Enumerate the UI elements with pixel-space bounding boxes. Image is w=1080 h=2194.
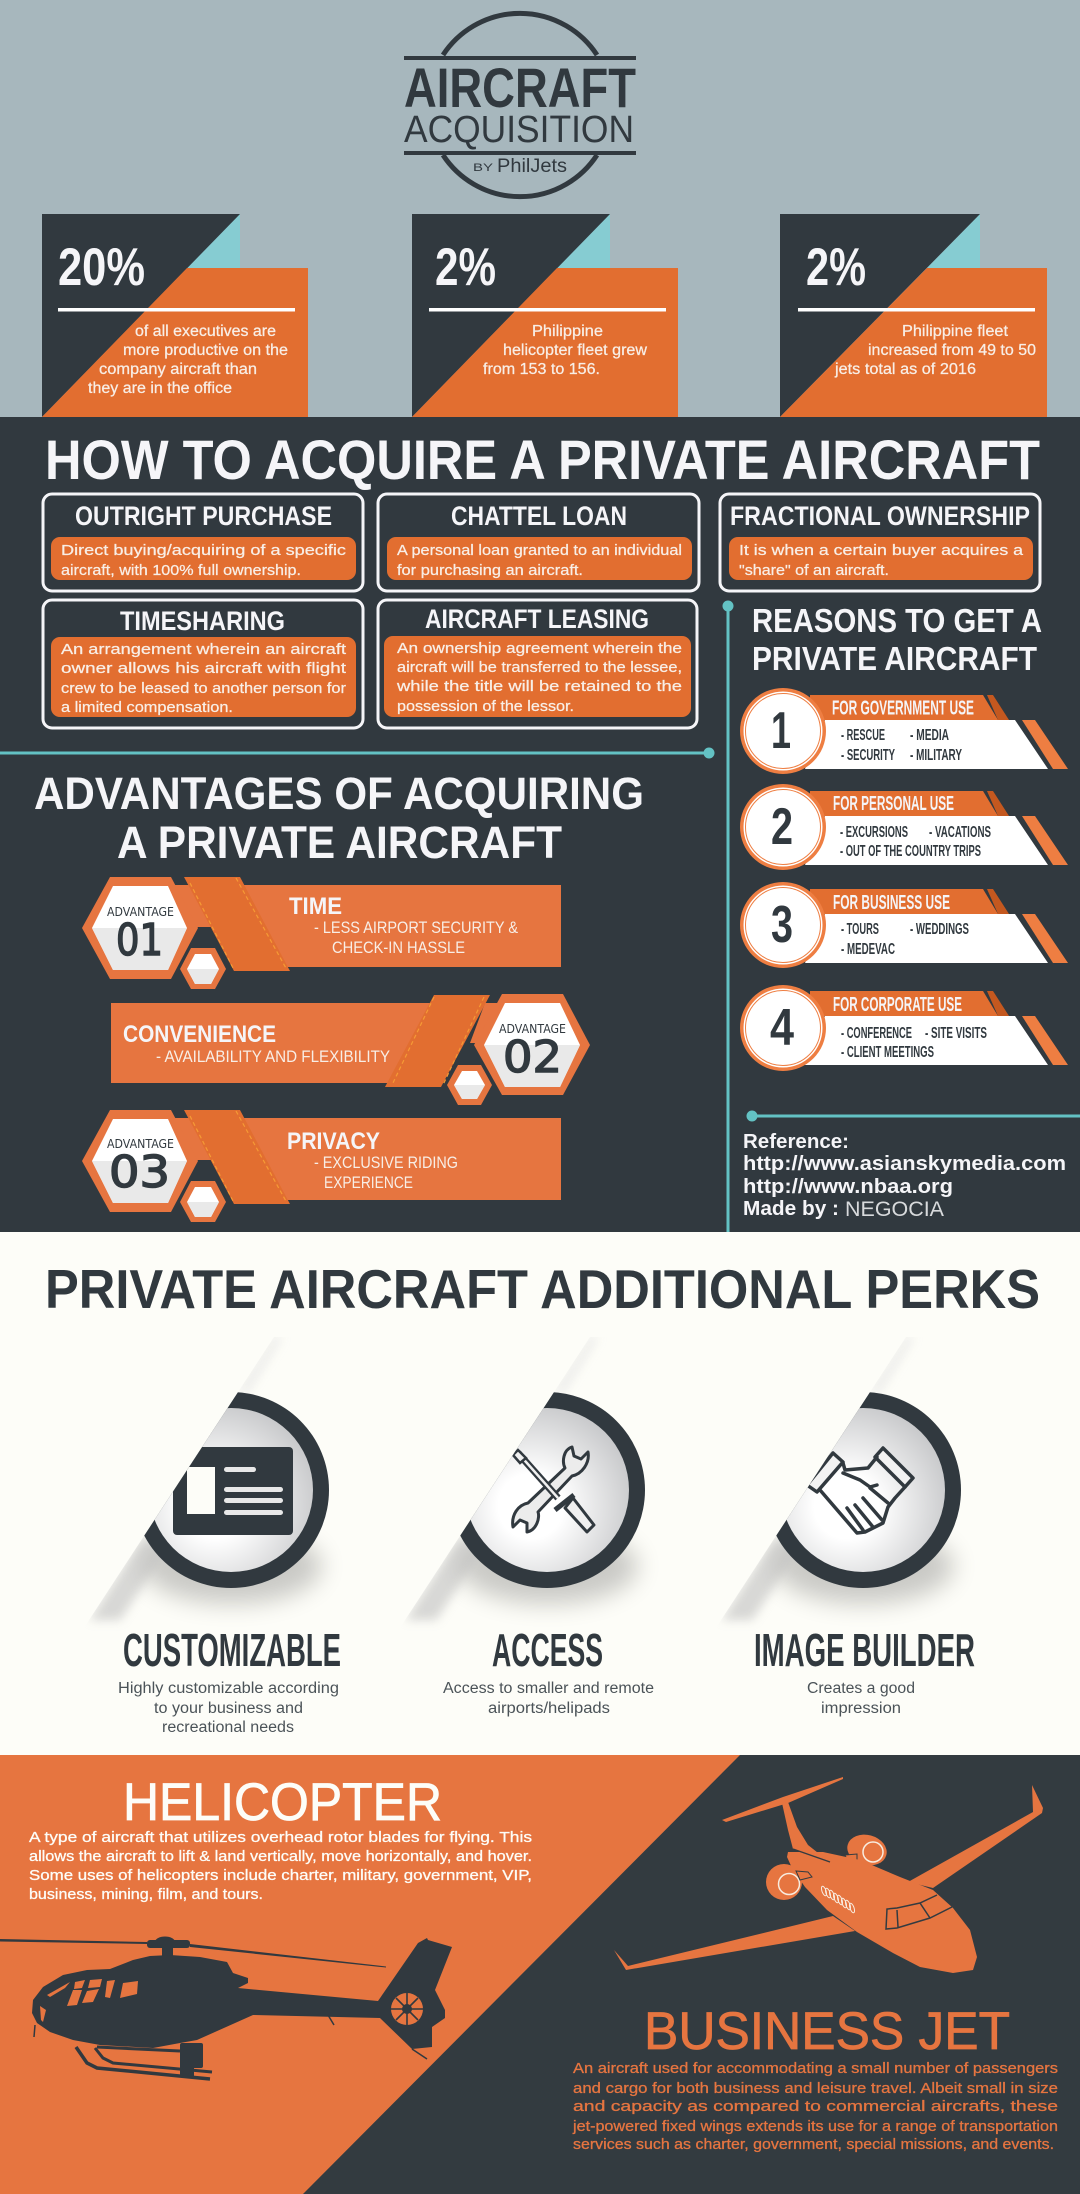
helicopter title and text: [29, 1773, 532, 1903]
panel: aircraft leasing: while the title will be retained to the: [396, 678, 682, 695]
stat card: 2% jet fleet: [780, 214, 1047, 417]
panel: aircraft leasing: An ownership agreement wherein the: [397, 640, 682, 657]
panel: outright purchase: [43, 494, 363, 591]
stat card: 2% helicopter fleet: [412, 214, 678, 417]
reason 2: personal use: - EXCURSIONS: [840, 824, 908, 841]
panel: fractional ownership: "share" of an aircraft.: [739, 562, 889, 579]
reason 3: business use: - TOURS: [841, 921, 879, 938]
advantage 03: privacy: - EXCLUSIVE RIDING: [314, 1153, 458, 1172]
reference credits: Reference:: [743, 1131, 849, 1153]
stat card: 20%: [42, 214, 308, 417]
panel: aircraft leasing: aircraft will be transferred to the lessee,: [397, 659, 682, 676]
stat card: 2% jet fleet: 2%: [806, 238, 866, 297]
business jet title and text: [572, 2002, 1058, 2153]
panel: timesharing: owner allows his aircraft with flight: [61, 660, 347, 677]
advantage 03: privacy: PRIVACY: [287, 1128, 380, 1155]
logo: Aircraft Acquisition by PhilJets: BY: [473, 162, 494, 174]
advantage 01: time: 01: [116, 915, 163, 966]
reference credits: [743, 1131, 1066, 1221]
heading: reasons: [752, 602, 1042, 677]
panel: business jet dark side: [303, 1755, 1080, 2194]
stat card: 20%: more productive on the: [123, 342, 288, 359]
reason 3: business use: [740, 882, 1068, 968]
logo: Aircraft Acquisition by PhilJets: [404, 13, 636, 197]
reason 1: government use: [740, 688, 1068, 774]
business jet title and text: and capacity as compared to commercial aircrafts, these: [573, 2098, 1058, 2115]
reason 4: corporate use: - CLIENT MEETINGS: [841, 1044, 934, 1061]
perk: image builder: impression: [821, 1700, 901, 1717]
business jet title and text: jet-powered fixed wings extends its use for a range of transportation: [572, 2118, 1058, 2135]
panel: timesharing: a limited compensation.: [61, 699, 233, 716]
panel: perks background: [0, 1232, 1080, 1756]
stat card: 2% jet fleet: Philippine fleet: [902, 323, 1009, 340]
reason 3: business use: - WEDDINGS: [910, 921, 969, 938]
panel: aircraft leasing: [378, 600, 697, 728]
reference credits: NEGOCIA: [845, 1198, 944, 1221]
panel: chattel loan: A personal loan granted to an individual: [397, 542, 682, 559]
perk: access: airports/helipads: [488, 1700, 610, 1717]
panel: fractional ownership: It is when a certain buyer acquires a: [739, 542, 1024, 559]
reason 3: business use: - MEDEVAC: [841, 941, 895, 958]
stat card: 2% helicopter fleet: 2%: [435, 238, 496, 297]
advantage 02: convenience: [111, 994, 590, 1105]
reason 4: corporate use: FOR CORPORATE USE: [833, 994, 962, 1016]
helicopter title and text: allows the aircraft to lift & land vertically, move horizontally, and hover.: [29, 1848, 532, 1865]
business jet title and text: An aircraft used for accommodating a small number of passengers: [573, 2060, 1058, 2077]
perk: customizable: [90, 1337, 341, 1736]
panel: dark how-to section background: [0, 417, 1080, 1232]
reason 4: corporate use: - SITE VISITS: [925, 1025, 987, 1042]
logo: Aircraft Acquisition by PhilJets: ACQUISITION: [404, 109, 634, 151]
business jet title and text: services such as charter, government, special missions, and events.: [573, 2136, 1054, 2153]
helicopter title and text: business, mining, film, and tours.: [29, 1886, 263, 1903]
reason 1: government use: - MEDIA: [910, 727, 949, 744]
advantage 02: convenience: 02: [503, 1032, 562, 1083]
reason 1: government use: - SECURITY: [841, 747, 895, 764]
panel: outright purchase: OUTRIGHT PURCHASE: [75, 501, 332, 531]
helicopter title and text: A type of aircraft that utilizes overhead rotor blades for flying. This: [29, 1829, 532, 1846]
panel: chattel loan: [378, 494, 699, 591]
panel: header background: [0, 0, 1080, 417]
panel: helicopter orange side: [0, 1755, 1080, 2194]
advantage 01: time: TIME: [289, 893, 342, 920]
advantage 03: privacy: [82, 1110, 561, 1222]
reason 3: business use: FOR BUSINESS USE: [833, 892, 950, 914]
stat card: 2% helicopter fleet: from 153 to 156.: [483, 361, 600, 378]
reason 1: government use: - MILITARY: [910, 747, 962, 764]
teal divider lines with dots: [0, 600, 1080, 1232]
reason 2: personal use: 2: [771, 798, 793, 856]
panel: aircraft leasing: possession of the lessor.: [397, 698, 574, 715]
advantage 03: privacy: EXPERIENCE: [324, 1173, 413, 1192]
stat card: 20%: of all executives are: [135, 323, 276, 340]
reason 4: corporate use: 4: [770, 999, 794, 1057]
advantage 01: time: ADVANTAGE: [107, 905, 174, 919]
reason 2: personal use: - VACATIONS: [929, 824, 991, 841]
perk: customizable: CUSTOMIZABLE: [123, 1624, 341, 1676]
stat card: 20%: company aircraft than: [99, 361, 257, 378]
advantage 03: privacy: ADVANTAGE: [107, 1137, 174, 1151]
panel: timesharing: [43, 600, 363, 728]
advantage 02: convenience: ADVANTAGE: [499, 1022, 566, 1036]
advantage 02: convenience: CONVENIENCE: [123, 1021, 276, 1048]
icon: helicopter silhouette: [0, 1936, 452, 2079]
advantage 01: time: [82, 877, 561, 989]
reason 1: government use: FOR GOVERNMENT USE: [832, 698, 974, 720]
logo: Aircraft Acquisition by PhilJets: AIRCRAFT: [404, 56, 636, 119]
reference credits: http://www.nbaa.org: [743, 1176, 953, 1198]
stat card: 20%: they are in the office: [88, 380, 232, 397]
stat card: 2% jet fleet: jets total as of 2016: [834, 361, 976, 378]
reason 1: government use: 1: [771, 702, 791, 760]
helicopter title and text: HELICOPTER: [123, 1773, 442, 1832]
panel: timesharing: crew to be leased to another person for: [61, 680, 346, 697]
icon: handshake in ring: [722, 1337, 961, 1620]
perk: customizable: Highly customizable according: [118, 1680, 339, 1697]
reason 2: personal use: [740, 784, 1068, 870]
heading: advantages: [34, 768, 644, 868]
advantage 01: time: CHECK-IN HASSLE: [332, 938, 465, 957]
logo: Aircraft Acquisition by PhilJets: PhilJets: [497, 156, 567, 177]
reason 4: corporate use: [740, 985, 1068, 1071]
stat card: 20%: 20%: [58, 238, 145, 297]
reference credits: http://www.asianskymedia.com: [743, 1153, 1066, 1175]
business jet title and text: and cargo for both business and leisure travel. Albeit small in size: [573, 2080, 1058, 2097]
heading: reasons: PRIVATE AIRCRAFT: [752, 640, 1037, 677]
heading: advantages: ADVANTAGES OF ACQUIRING: [34, 768, 644, 819]
perk: image builder: Creates a good: [807, 1680, 915, 1697]
advantage 02: convenience: - AVAILABILITY AND FLEXIBILITY: [156, 1047, 390, 1066]
heading: advantages: A PRIVATE AIRCRAFT: [117, 817, 562, 868]
panel: timesharing: An arrangement wherein an aircraft: [61, 641, 347, 658]
panel: chattel loan: CHATTEL LOAN: [451, 501, 627, 531]
perk: access: Access to smaller and remote: [443, 1680, 654, 1697]
advantage 01: time: - LESS AIRPORT SECURITY &: [314, 918, 519, 937]
perk: image builder: [722, 1337, 975, 1717]
advantage 03: privacy: 03: [109, 1147, 170, 1198]
panel: aircraft leasing: AIRCRAFT LEASING: [425, 604, 649, 634]
panel: fractional ownership: [720, 494, 1040, 591]
perk: customizable: to your business and: [154, 1700, 303, 1717]
perk: customizable: recreational needs: [162, 1719, 294, 1736]
reason 3: business use: 3: [771, 896, 793, 954]
icon: ID card in ring: [90, 1337, 329, 1620]
panel: fractional ownership: FRACTIONAL OWNERSHIP: [730, 501, 1030, 531]
reason 4: corporate use: - CONFERENCE: [841, 1025, 912, 1042]
perk: access: ACCESS: [492, 1624, 603, 1676]
heading: reasons: REASONS TO GET A: [752, 602, 1042, 639]
reason 1: government use: - RESCUE: [841, 727, 885, 744]
icon: wrench and screwdriver in ring: [406, 1337, 645, 1620]
perk: access: [406, 1337, 654, 1717]
reference credits: Made by :: [743, 1198, 839, 1220]
helicopter title and text: Some uses of helicopters include charter, military, government, VIP,: [29, 1867, 532, 1884]
panel: outright purchase: aircraft, with 100% full ownership.: [61, 562, 301, 579]
panel: chattel loan: for purchasing an aircraft.: [397, 562, 583, 579]
panel: outright purchase: Direct buying/acquiring of a specific: [61, 542, 347, 559]
panel: timesharing: TIMESHARING: [120, 606, 285, 636]
icon: business jet silhouette: [614, 1777, 1043, 1973]
business jet title and text: BUSINESS JET: [644, 2002, 1010, 2061]
stat card: 2% helicopter fleet: Philippine: [532, 323, 603, 340]
stat card: 2% jet fleet: increased from 49 to 50: [868, 342, 1036, 359]
stat card: 2% helicopter fleet: helicopter fleet grew: [503, 342, 648, 359]
reason 2: personal use: FOR PERSONAL USE: [833, 793, 954, 815]
reason 2: personal use: - OUT OF THE COUNTRY TRIPS: [840, 843, 981, 860]
